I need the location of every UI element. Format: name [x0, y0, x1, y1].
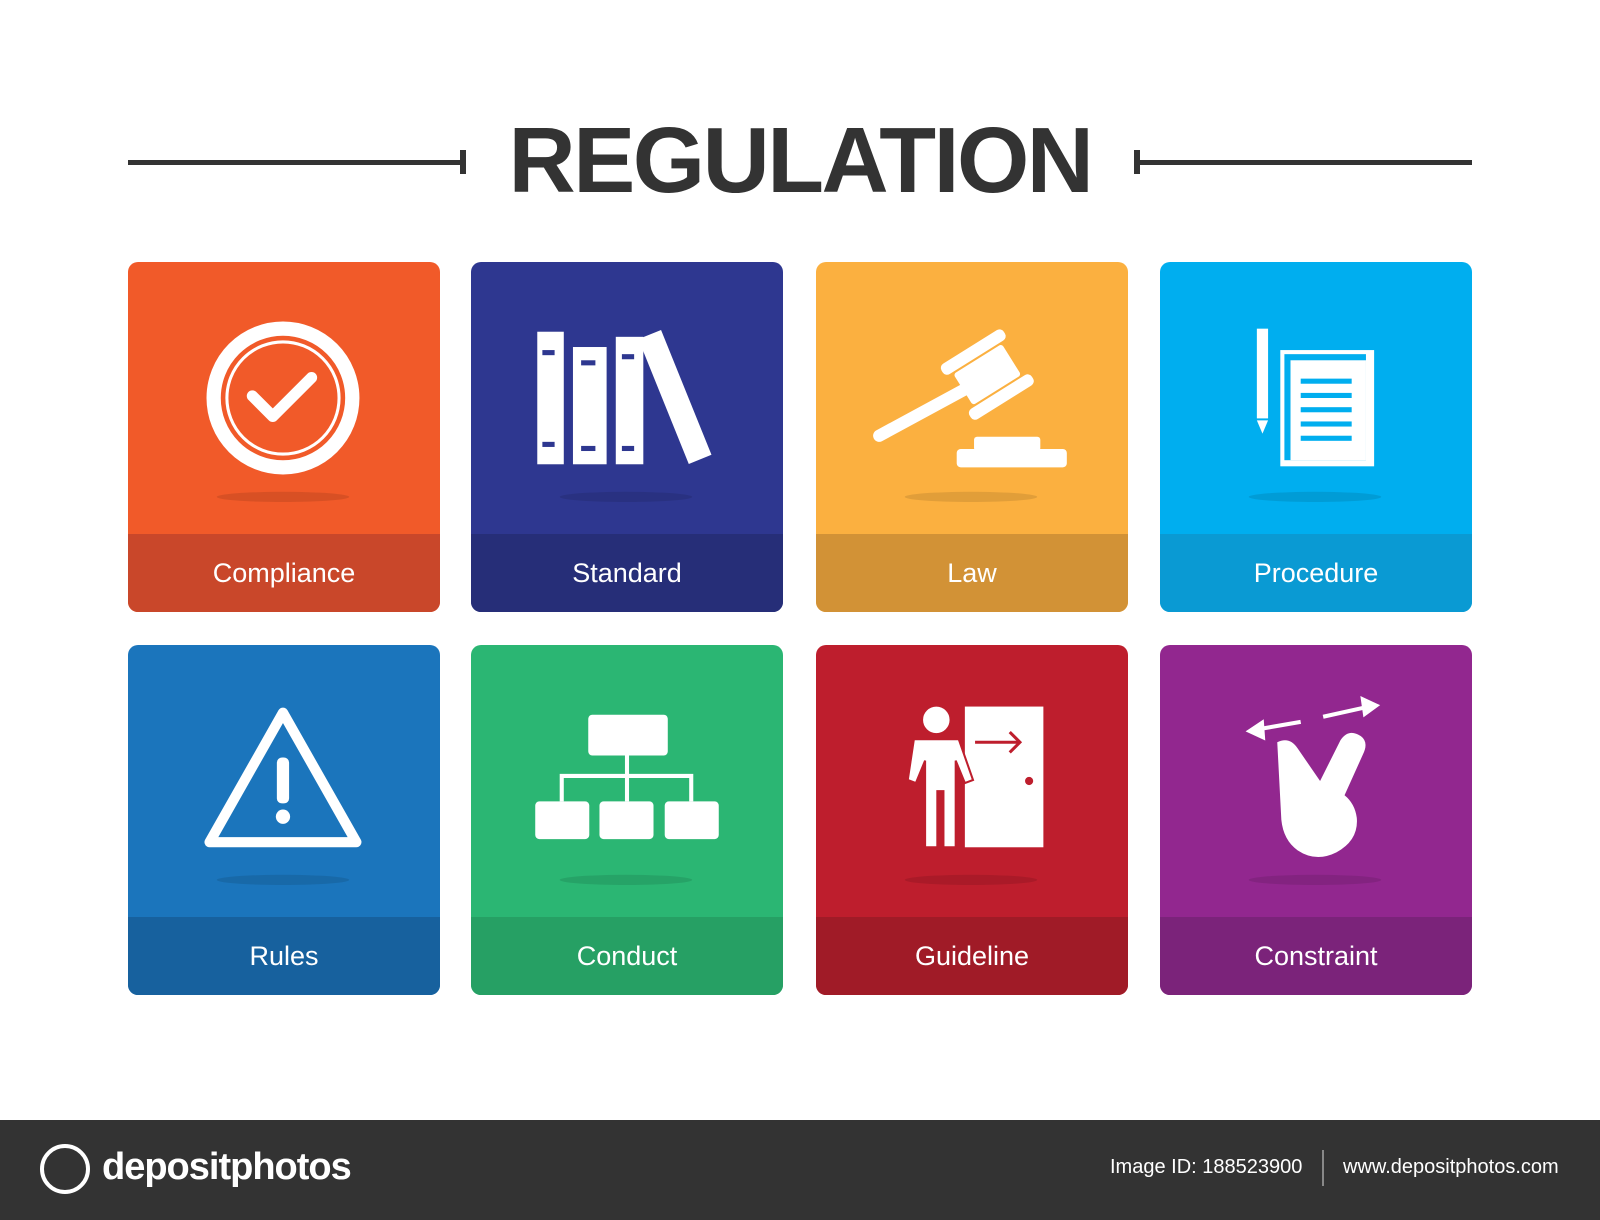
card: Conduct: Conduct [577, 941, 677, 971]
card: Procedure [1160, 262, 1472, 612]
card: Standard: Standard [572, 558, 682, 588]
card: Rules: Rules [249, 941, 319, 971]
footer url: www.depositphotos.com [1343, 1156, 1559, 1178]
card: Law [816, 262, 1128, 612]
footer logo: depositphotos [102, 1146, 351, 1188]
left rule [128, 160, 464, 165]
card: Law: Law [947, 558, 997, 588]
card: Constraint [1160, 645, 1472, 995]
card: Conduct [471, 645, 783, 995]
card: Compliance: Compliance [213, 558, 355, 588]
card: Rules [128, 645, 440, 995]
card: Procedure: Procedure [1254, 558, 1378, 588]
footer logo [40, 1144, 351, 1194]
card: Constraint: Constraint [1254, 941, 1378, 971]
card: Standard [471, 262, 783, 612]
title text: REGULATION [509, 108, 1091, 212]
right rule [1134, 150, 1140, 174]
footer id: Image ID: 188523900 [1110, 1156, 1302, 1178]
title [128, 108, 1472, 212]
card: Guideline: Guideline [915, 941, 1029, 971]
card: Compliance [128, 262, 440, 612]
footer bar [0, 1120, 1600, 1220]
card: Guideline [816, 645, 1128, 995]
